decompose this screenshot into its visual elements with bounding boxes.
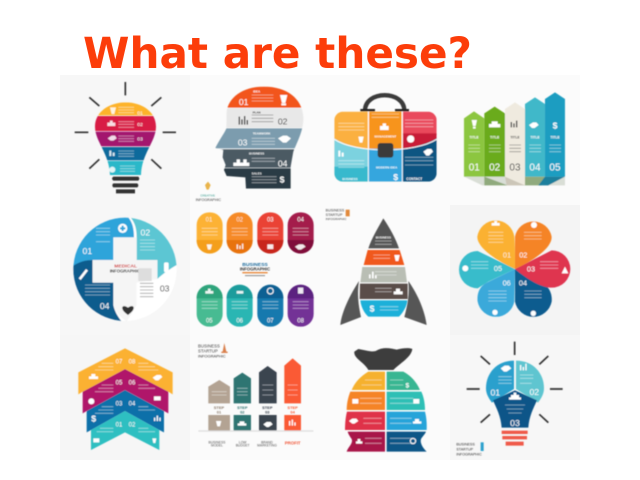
step captions: MODEL: [211, 444, 223, 448]
briefcase labels: MANAGEMENT: [374, 135, 396, 139]
icon: chevron dollar: $: [91, 414, 96, 424]
medical heading: MEDICAL: [114, 263, 137, 269]
step captions: BUSINESS: [209, 440, 226, 444]
panel: chevron arrows infographic: [78, 348, 173, 450]
rocket header: INFOGRAPHIC: [326, 217, 347, 221]
pill numbers bottom: 06: [236, 319, 244, 325]
step arrow 4: [284, 358, 301, 403]
briefcase labels: CONTACT: [406, 177, 422, 181]
icon: chevron glyphs: [88, 374, 162, 443]
icon: syringe: [79, 269, 88, 280]
step captions: LOW: [239, 440, 247, 444]
head numbers: 04: [278, 158, 288, 168]
chevron 05 06 magenta: [83, 369, 168, 413]
second bulb numbers: [490, 387, 539, 428]
pill numbers top: [206, 218, 305, 224]
icon: arrow dollar: $: [553, 121, 558, 131]
icon: dollar: $: [280, 175, 285, 185]
step labels: 03: [265, 410, 270, 415]
pill numbers bottom: 05: [206, 319, 213, 325]
panel: eight pills infographic: [197, 212, 314, 327]
startup header: BUSINESS: [456, 442, 475, 446]
arrow numbers: [469, 162, 561, 173]
step arrow 3: [259, 366, 277, 403]
icon: arrow glyphs: [472, 120, 539, 129]
panel: rocket infographic: [326, 209, 427, 325]
chevron numbers: 04: [129, 402, 136, 408]
icon: bulb rays: [75, 82, 176, 169]
arrow titles: TITLE: [490, 135, 500, 139]
icon: bag shapes: [349, 399, 421, 444]
arrow 02: [484, 107, 505, 177]
business startup header: BUSINESS: [198, 344, 220, 349]
icon: grey sign: [138, 268, 152, 281]
icon: dollar: $: [370, 304, 375, 314]
icon: heart: [122, 306, 134, 315]
icon: bag dollar: $: [405, 383, 409, 390]
panel: briefcase infographic: [334, 95, 437, 182]
head section titles: SALES: [252, 172, 262, 176]
startup header: STARTUP: [456, 448, 474, 452]
rocket header: STARTUP: [326, 213, 343, 217]
step labels: 01: [217, 410, 222, 415]
briefcase clasp: [378, 143, 393, 158]
briefcase labels: MODERN IDEA: [376, 166, 398, 170]
circle numbers: 03: [160, 284, 170, 294]
circle numbers: 02: [141, 228, 150, 238]
step captions: MARKETING: [257, 444, 277, 448]
briefcase labels: [342, 135, 422, 181]
business startup header: STARTUP: [198, 348, 218, 353]
step labels: STEP: [262, 405, 273, 410]
pill 06: [227, 285, 253, 327]
step labels: STEP: [237, 405, 248, 410]
petal 04 dark blue: [515, 269, 552, 317]
briefcase quadrants: [334, 112, 437, 182]
medical heading: INFOGRAPHIC: [110, 269, 140, 274]
icon: capsule: [164, 262, 169, 272]
icon: rocket glyphs: [369, 255, 403, 294]
arrow 04: [525, 97, 545, 177]
business infographic heading: INFOGRAPHIC: [240, 266, 270, 271]
pill 01: [197, 212, 223, 254]
icon: arrow chart: [511, 121, 517, 127]
pill 05: [197, 285, 223, 327]
rocket header: [326, 209, 350, 221]
infographic collage: [70, 82, 570, 457]
arrow titles: TITLE: [510, 135, 520, 139]
petal numbers: 06: [503, 279, 511, 288]
step labels: [214, 405, 298, 415]
chevron numbers: 03: [116, 402, 123, 408]
head bands: [213, 86, 307, 189]
chevron numbers: 07: [116, 360, 123, 366]
icon: second bulb glyphs: [501, 364, 527, 400]
petal 03 red: [515, 250, 570, 288]
rocket body bands: [360, 218, 408, 317]
bulb segment right: [516, 361, 544, 403]
panel: second bulb infographic: [456, 342, 563, 457]
step arrow 1: [208, 380, 230, 403]
panel: five arrows infographic: [464, 92, 565, 185]
pill numbers bottom: [206, 319, 305, 325]
head numbers: [238, 97, 288, 168]
panel: flower petal infographic: [459, 220, 570, 317]
head section titles: PLAN: [253, 110, 261, 114]
head numbers: 01: [239, 97, 249, 107]
bulb numbers: 02: [137, 122, 143, 128]
step arrow 2: [234, 373, 251, 403]
chevron numbers: [116, 360, 136, 429]
petal 02 orange: [515, 222, 552, 269]
business infographic heading: [240, 262, 270, 276]
step labels: 04: [290, 410, 296, 415]
bulb numbers: 03: [137, 136, 143, 142]
chevron numbers: 06: [129, 381, 136, 387]
medical heading: [110, 263, 140, 274]
pill 08: [288, 285, 314, 327]
head section titles: TEAMWORK: [253, 132, 271, 136]
arrow titles: TITLE: [550, 135, 560, 139]
pill 07: [257, 285, 283, 327]
panel: money bag infographic: [345, 348, 427, 452]
briefcase labels: BUSINESS: [342, 177, 358, 181]
icon: petal glyphs: [462, 221, 568, 316]
title: What are these?: [83, 30, 472, 79]
icon: bulb band glyphs: [107, 107, 117, 173]
icon: clock ring: [267, 288, 273, 294]
photo collage background: [60, 75, 580, 460]
petal numbers: 05: [494, 264, 502, 273]
startup header: INFOGRAPHIC: [456, 453, 482, 457]
head section titles: IDEA: [253, 89, 261, 93]
arrow titles: TITLE: [469, 135, 479, 139]
arrow numbers: 01: [469, 162, 480, 173]
business infographic heading: BUSINESS: [242, 262, 268, 268]
icon: bag ring: [410, 438, 416, 444]
pill numbers top: 01: [206, 218, 213, 224]
pill 02: [227, 212, 253, 254]
arrow titles: [469, 135, 560, 139]
pill 03: [257, 212, 283, 254]
circle numbers: 04: [100, 301, 110, 311]
bulb numbers: 01: [137, 110, 143, 116]
icon: bar chart: [239, 116, 248, 125]
step captions: BRAND: [261, 440, 273, 444]
arrow numbers: 02: [489, 162, 501, 173]
petal numbers: 04: [519, 279, 527, 288]
panel: medical circle infographic: [72, 216, 178, 322]
petal 05 teal: [459, 251, 515, 288]
second bulb numbers: 01: [490, 388, 500, 398]
arrow titles: TITLE: [530, 135, 540, 139]
pill numbers bottom: 08: [297, 319, 305, 325]
head section titles: BUSINESS: [249, 152, 264, 156]
petal numbers: 02: [519, 251, 527, 260]
step lower blocks: [208, 415, 301, 431]
creative infographic logo: [196, 182, 221, 202]
chevron numbers: 02: [129, 423, 136, 429]
head section titles: [249, 89, 271, 176]
rocket header: BUSINESS: [326, 209, 345, 213]
bulb numbers: [137, 110, 143, 142]
arrow 05: [545, 92, 565, 177]
circle numbers: [83, 228, 170, 311]
rocket title: BUSINESS: [376, 235, 391, 239]
icon: dollar sign: $: [393, 172, 398, 182]
petal numbers: 03: [527, 265, 535, 274]
icon: pill glyphs: [205, 244, 306, 294]
step labels: 02: [240, 410, 245, 415]
pill 04: [288, 212, 314, 254]
creative infographic logo: CREATIVE: [200, 194, 215, 198]
head numbers: 03: [238, 137, 248, 147]
petal 01 yellow: [477, 220, 515, 269]
bulb segment bottom: [493, 390, 537, 428]
pill numbers top: 04: [297, 218, 305, 224]
head numbers: 02: [278, 116, 288, 126]
step captions: [209, 440, 301, 448]
arrow 03: [505, 102, 525, 185]
arrow numbers: 04: [529, 162, 541, 173]
icon: medical cross badge: [118, 224, 127, 233]
second bulb rays: [467, 342, 563, 423]
pill numbers bottom: 07: [267, 319, 274, 325]
chevron 07 08 yellow: [78, 348, 173, 394]
pill numbers top: 03: [267, 218, 274, 224]
panel: light bulb infographic: [75, 82, 176, 193]
arrow 01: [464, 111, 484, 177]
arrow numbers: 03: [509, 162, 521, 173]
step captions: BUDGET: [236, 444, 250, 448]
petal numbers: 01: [503, 251, 511, 260]
chevron numbers: 08: [129, 360, 136, 366]
icon: pie: [407, 135, 414, 143]
icon: briefcase glyphs: [338, 123, 433, 157]
bulb colour bands: [93, 102, 160, 175]
bulb base: [112, 177, 139, 193]
business startup header: [198, 343, 228, 358]
second bulb numbers: 02: [529, 387, 539, 397]
bulb segment left: [486, 361, 514, 403]
startup header: [456, 442, 484, 457]
chevron 01 02 teal: [91, 411, 159, 450]
briefcase handle: [365, 95, 404, 111]
pill numbers top: 02: [236, 218, 244, 224]
petal 06 blue: [478, 269, 515, 317]
circle quadrants: [72, 216, 178, 322]
business startup header: INFOGRAPHIC: [198, 353, 226, 358]
second bulb base: [502, 431, 528, 446]
chevron 03 04 blue: [87, 390, 164, 432]
chevron numbers: 05: [116, 381, 123, 387]
bag top: [354, 348, 412, 370]
chevron numbers: 01: [116, 423, 123, 429]
bag segments: [345, 372, 427, 452]
panel: head silhouette infographic: [196, 86, 307, 202]
panel: business startup steps infographic: [198, 343, 313, 448]
circle numbers: 01: [83, 246, 92, 256]
petal numbers: [494, 251, 535, 288]
second bulb numbers: 03: [510, 418, 520, 428]
rocket fins: [340, 281, 427, 325]
step labels: STEP: [214, 405, 225, 410]
icon: step glyphs: [216, 420, 296, 427]
arrow shadows: [464, 177, 565, 185]
step labels: STEP: [287, 405, 298, 410]
step captions: PROFIT: [285, 441, 301, 446]
icon: head glyphs: [233, 95, 291, 166]
creative infographic logo: INFOGRAPHIC: [196, 198, 221, 202]
arrow numbers: 05: [549, 162, 561, 173]
